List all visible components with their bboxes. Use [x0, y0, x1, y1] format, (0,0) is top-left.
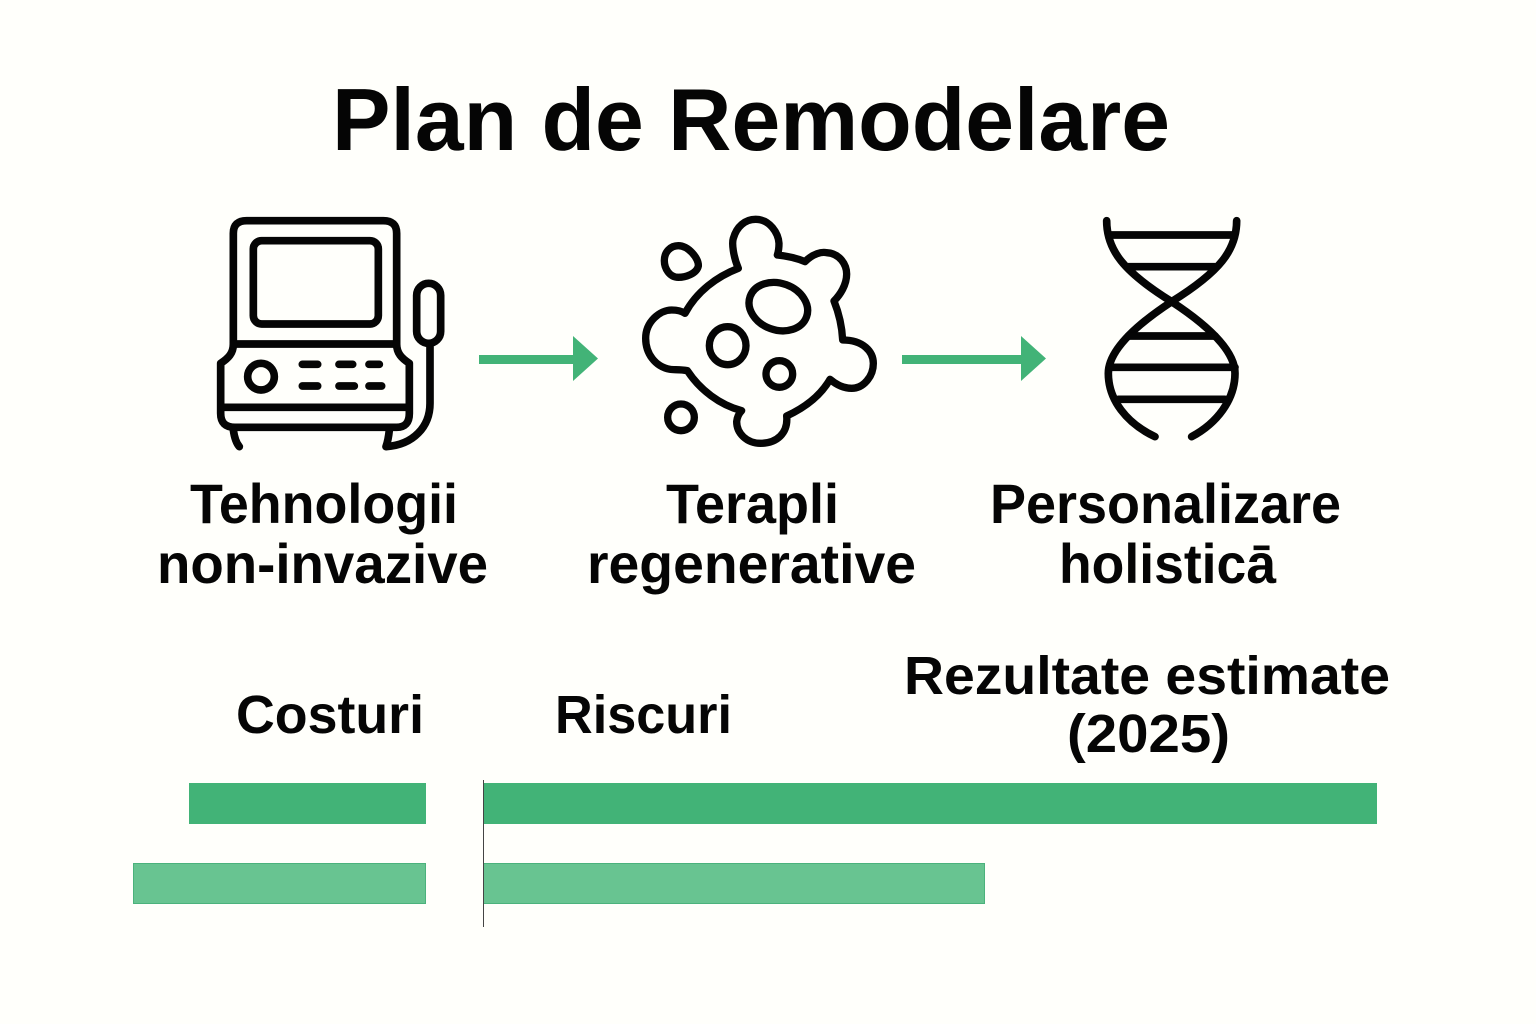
bar: costs bottom: [134, 864, 426, 904]
bar: results top: [483, 783, 1377, 824]
title: Plan de Remodelare: [332, 70, 1170, 169]
column heading: Costuri: Costuri: [236, 685, 424, 745]
label: Terapii regenerative: [587, 472, 916, 595]
arrow: device to cells: [479, 336, 598, 381]
bar: costs top: [189, 783, 426, 824]
label: Terapii regenerative: Terapli: [666, 472, 839, 535]
column heading: Rezultate estimate (2025): [904, 646, 1390, 764]
label: Tehnologii non-invazive: [157, 472, 488, 595]
column heading: Rezultate estimate (2025): Rezultate estimate: [904, 646, 1390, 706]
icon: regenerative cell: [646, 219, 873, 443]
bar chart: [134, 780, 1377, 927]
label: Terapii regenerative: regenerative: [587, 532, 916, 595]
label: Personalizare holistica: Personalizare: [990, 472, 1341, 535]
icon: ultrasound device: [221, 221, 441, 447]
axis line: [483, 780, 484, 927]
label: Personalizare holistica: [990, 472, 1341, 595]
arrow: cells to DNA: [902, 336, 1046, 381]
icon: DNA helix: [1107, 221, 1237, 437]
column heading: Rezultate estimate (2025): (2025): [1067, 704, 1230, 764]
label: Tehnologii non-invazive: non-invazive: [157, 532, 488, 595]
label: Personalizare holistica: holisticā: [1059, 532, 1277, 595]
bar: results bottom: [484, 864, 984, 904]
column heading: Riscuri: Riscuri: [555, 685, 732, 745]
label: Tehnologii non-invazive: Tehnologii: [190, 472, 458, 535]
